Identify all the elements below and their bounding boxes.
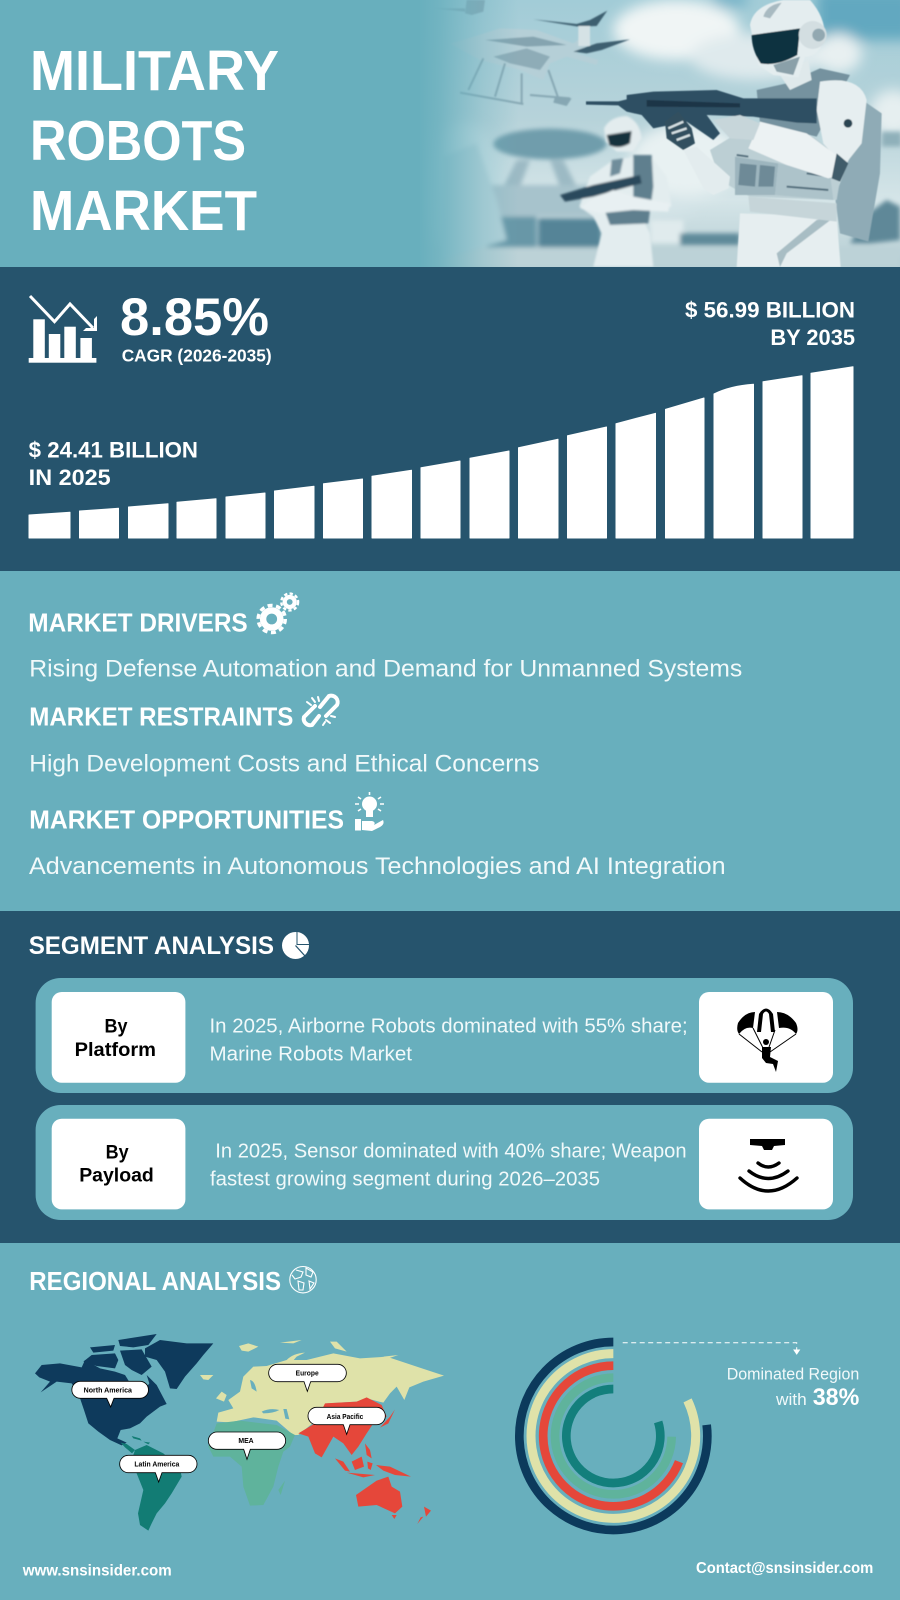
region: Latin America: [121, 1436, 182, 1531]
panel: regional analysis: [29, 1266, 859, 1531]
CAGR label: CAGR (2026-2035): [122, 346, 272, 366]
region: Asia Pacific: [298, 1397, 431, 1524]
text: driver: Rising Defense Automation and Demand for Unmanned Systems: [29, 656, 742, 683]
text: platform finding: Marine Robots Market: [210, 1044, 412, 1066]
2035 market value: $ 56.99 BILLION: [685, 298, 855, 323]
panel: market dynamics: [28, 594, 742, 880]
text: platform finding: [210, 1016, 688, 1066]
header photo: robot soldiers and drone: [418, 0, 900, 267]
callout: dominated region share: Dominated Region: [727, 1364, 859, 1383]
arrow: dashed leader to dominated region: [623, 1343, 799, 1354]
region: Middle East and Africa: [208, 1421, 295, 1506]
title: MARKET: [30, 179, 257, 243]
label card: by platform: [52, 992, 185, 1083]
label card: by payload: By: [106, 1141, 129, 1163]
2025 market value: [29, 438, 198, 490]
callout: MEA: MEA: [238, 1438, 254, 1445]
callout: Asia Pacific: [308, 1407, 385, 1434]
text: payload finding: fastest growing segment during 2026–2035: [210, 1168, 600, 1190]
icon: pie chart: [282, 930, 311, 959]
icon: light bulb in hand: [355, 792, 384, 831]
region: Europe and Russia: [200, 1340, 444, 1435]
callout: North America: North America: [84, 1387, 132, 1394]
callout: dominated region share: 38%: [813, 1384, 859, 1411]
callout: Europe: Europe: [296, 1371, 319, 1378]
heading: market restraints: MARKET RESTRAINTS: [29, 701, 293, 731]
drone: [433, 0, 630, 106]
icon card: sensor: [699, 1119, 833, 1209]
text: payload finding: In 2025, Sensor dominated with 40% share; Weapon: [215, 1140, 687, 1162]
icon card: parachute: [699, 992, 833, 1083]
callout: Asia Pacific: Asia Pacific: [327, 1414, 363, 1421]
2035 market value: [685, 298, 855, 350]
footer: website: www.snsinsider.com: [22, 1563, 172, 1580]
icon: chart with falling arrow: [29, 296, 97, 363]
region: North America: [35, 1334, 213, 1445]
label card: by payload: Payload: [79, 1165, 154, 1187]
segment row: by payload: [36, 1105, 853, 1220]
heading: market opportunities: MARKET OPPORTUNITIES: [29, 804, 344, 834]
segment row: by platform: [36, 978, 853, 1093]
text: opportunity: Advancements in Autonomous Technologies and AI Integration: [29, 853, 726, 880]
panel: segment analysis: [0, 911, 900, 1243]
heading: regional analysis: REGIONAL ANALYSIS: [29, 1268, 281, 1296]
2025 market value: $ 24.41 BILLION: [29, 438, 198, 463]
label card: by payload: [52, 1119, 185, 1209]
callout: dominated region share: [727, 1364, 859, 1411]
bar chart: market growth: [29, 367, 853, 538]
radial chart: regional shares: [519, 1342, 707, 1530]
callout: North America: [72, 1381, 148, 1407]
callout: dominated region share: with: [775, 1390, 807, 1409]
heading: segment analysis: SEGMENT ANALYSIS: [29, 932, 274, 960]
panel: market size: [0, 267, 900, 571]
CAGR value: 8.85%: [120, 288, 269, 347]
2035 market value: BY 2035: [770, 325, 855, 350]
label card: by platform: By: [104, 1016, 128, 1038]
front robot: [586, 0, 882, 267]
title: [30, 39, 279, 243]
title: MILITARY: [30, 39, 279, 103]
icon: broken chain link: [304, 696, 338, 725]
2025 market value: IN 2025: [29, 465, 111, 490]
callout: Latin America: [120, 1455, 197, 1482]
text: restraint: High Development Costs and Ethical Concerns: [29, 751, 539, 778]
back robot: [560, 116, 672, 267]
icon: globe: [290, 1266, 316, 1293]
callout: Latin America: Latin America: [134, 1461, 179, 1468]
icon: gears: [258, 594, 298, 633]
label card: by platform: Platform: [75, 1039, 156, 1061]
title: ROBOTS: [30, 109, 246, 173]
callout: MEA: [208, 1432, 286, 1459]
callout: Europe: [269, 1364, 346, 1391]
footer: contact: Contact@snsinsider.com: [696, 1560, 873, 1577]
text: payload finding: [210, 1140, 687, 1190]
photo fade: [420, 0, 508, 267]
text: platform finding: In 2025, Airborne Robots dominated with 55% share;: [210, 1016, 688, 1038]
heading: market drivers: MARKET DRIVERS: [28, 607, 248, 637]
world map: [35, 1334, 444, 1531]
